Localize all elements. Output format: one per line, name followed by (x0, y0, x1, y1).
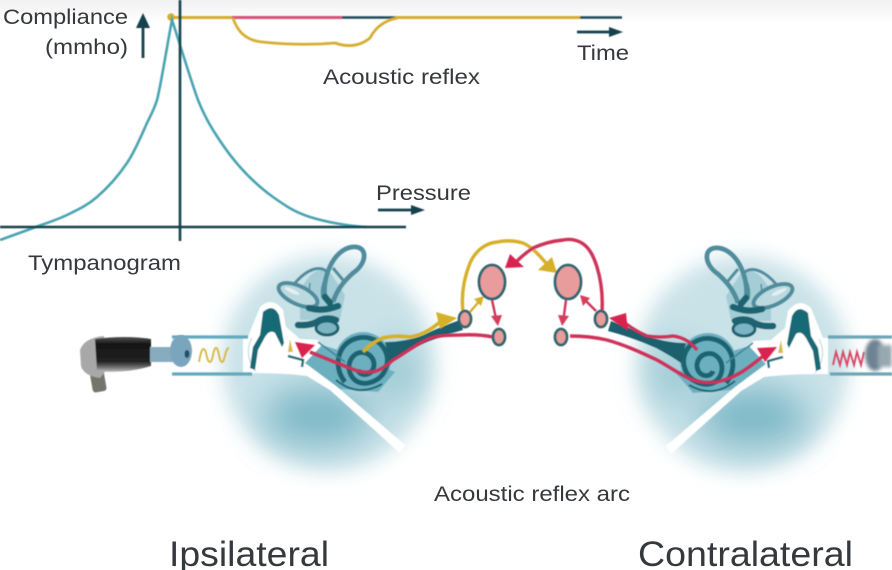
left ear anatomy (222, 247, 463, 471)
red crossing arc (517, 239, 602, 312)
red sound wave (833, 352, 864, 365)
pressure arrow (378, 205, 425, 215)
yellow crossing arrowhead (538, 257, 557, 273)
small arrowheads (474, 295, 590, 326)
label: tympanogram: Tympanogram (28, 251, 181, 275)
probe neck (150, 347, 174, 362)
probe light cap (80, 336, 108, 378)
compliance arrow (136, 13, 150, 58)
time arrow (577, 27, 623, 37)
left yellow pathway (363, 322, 440, 352)
right red pathway (570, 336, 767, 383)
probe ear tip (170, 335, 192, 367)
label: pressure: Pressure (376, 181, 471, 205)
probe body (95, 337, 151, 372)
start marker (167, 13, 175, 21)
tympanogram chart (0, 0, 623, 241)
left red pathway (310, 335, 493, 372)
probe tip opening (184, 350, 190, 358)
left ear canal (172, 337, 252, 374)
yellow sound wave (199, 348, 229, 362)
pressure axis (0, 226, 406, 228)
label: acoustic reflex: Acoustic reflex (323, 65, 480, 89)
reflex trace: yellow baseline (170, 16, 580, 19)
right probe tip (865, 339, 892, 371)
yellow crossing arc (462, 241, 546, 312)
red crossing arrowhead (505, 254, 524, 268)
reflex trace: pink section (232, 16, 342, 19)
acoustic reflex chart (167, 13, 622, 46)
label: time: Time (577, 41, 629, 65)
tympanogram curve (0, 20, 367, 240)
right ear anatomy (608, 248, 849, 472)
right upper red pathway (625, 323, 697, 350)
right red arrowhead (757, 347, 777, 362)
probe connector (89, 369, 107, 393)
left yellow arrowhead (436, 312, 457, 329)
neural nuclei (459, 265, 607, 345)
reflex trace: yellow dip (233, 18, 397, 46)
label: acoustic reflex arc: Acoustic reflex arc (434, 482, 630, 506)
small connecting arrows (470, 298, 596, 323)
label: mmho: (mmho) (45, 35, 128, 59)
label: compliance: Compliance (3, 5, 128, 29)
compliance axis (179, 0, 181, 241)
right upper red arrowhead (609, 313, 628, 331)
right ear canal (828, 337, 892, 374)
time axis line (170, 16, 622, 19)
left red arrowhead (295, 342, 315, 358)
probe device (80, 335, 192, 393)
reflex arc neural pathway (295, 239, 777, 383)
